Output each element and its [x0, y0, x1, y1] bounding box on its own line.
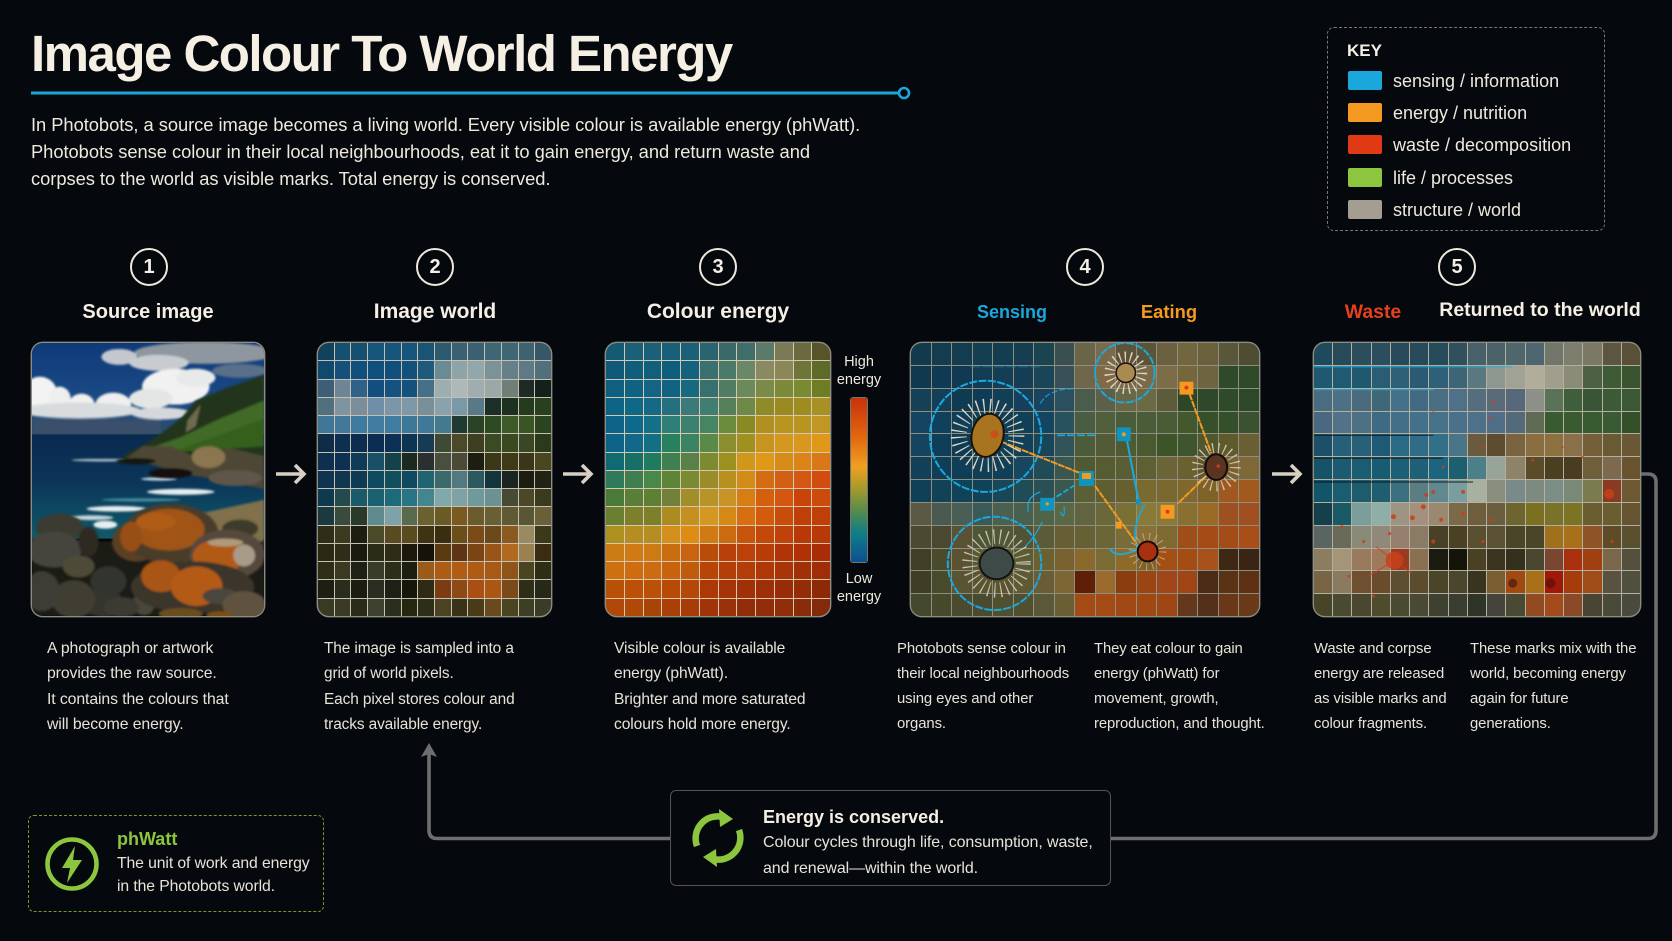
creature: small tan — [1110, 357, 1142, 389]
label: low energy: Low — [846, 571, 872, 587]
title underline with end dot — [31, 86, 910, 100]
caption: eating: They eat colour to gain — [1094, 640, 1243, 656]
label: high energy: energy — [837, 372, 881, 388]
caption: source image — [47, 640, 229, 733]
caption: image world: grid of world pixels. — [324, 665, 454, 682]
caption: sensing: Photobots sense colour in — [897, 640, 1066, 656]
intro paragraph: corpses to the world as visible marks. Total energy is conserved. — [31, 168, 550, 189]
heading: waste: Waste — [1345, 300, 1401, 322]
callout: energy is conserved — [670, 790, 1111, 886]
caption: image world: Each pixel stores colour and — [324, 691, 515, 708]
caption: eating: energy (phWatt) for — [1094, 666, 1219, 682]
heading: colour energy: Colour energy — [647, 300, 789, 322]
sky — [32, 343, 264, 437]
step number 1: 1 — [143, 256, 155, 278]
title: Image Colour To World Energy — [31, 25, 732, 82]
caption: colour energy — [614, 640, 805, 733]
dashed sensing links — [971, 367, 1145, 554]
icon: lightning bolt — [45, 837, 99, 891]
step number 4: 4 — [1079, 256, 1091, 278]
sensing rings — [930, 343, 1155, 610]
callout heading: Energy is conserved. — [763, 807, 944, 827]
arrow: panel 4 to 5 — [1272, 464, 1302, 484]
caption: returned: generations. — [1470, 716, 1551, 732]
creature: large amber — [959, 407, 1016, 464]
heading: image world: Image world — [374, 300, 496, 322]
eating nodes — [1082, 382, 1193, 529]
intro paragraph: Photobots sense colour in their local neighbourhoods, eat it to gain energy, and return waste and — [31, 141, 810, 162]
key heading: KEY — [1347, 41, 1382, 60]
caption: eating: reproduction, and thought. — [1094, 716, 1265, 732]
caption: waste: colour fragments. — [1314, 716, 1427, 732]
organisms, sensing rings and energy links — [928, 343, 1241, 611]
label: structure: structure / world — [1393, 200, 1521, 220]
caption: colour energy: energy (phWatt). — [614, 665, 728, 682]
panel 3: colour energy heat grid — [606, 343, 830, 616]
label: sensing: sensing / information — [1393, 71, 1559, 91]
icon: recycle arrows — [692, 809, 744, 867]
orange energy links — [1000, 394, 1211, 544]
label: low energy: energy — [837, 589, 881, 605]
step number 1 — [130, 248, 168, 286]
callout text — [763, 834, 1093, 876]
creature: brown — [1197, 448, 1235, 486]
caption: waste — [1314, 640, 1446, 732]
label: high energy: High — [844, 354, 874, 370]
step number 2: 2 — [429, 256, 441, 278]
caption: image world: The image is sampled into a — [324, 640, 514, 657]
panel 2: pixelated image world grid — [318, 343, 551, 616]
callout text: Colour cycles through life, consumption, waste, — [763, 834, 1093, 851]
swatch: waste — [1348, 135, 1382, 154]
waste marks and colour fragments — [1314, 366, 1614, 598]
foreground rocks — [24, 504, 266, 620]
swatch: life — [1348, 168, 1382, 186]
callout text: and renewal—within the world. — [763, 860, 978, 876]
panel 4: sensing and eating map — [911, 343, 1259, 616]
arrow: panel 1 to 2 — [276, 464, 306, 484]
cliff — [116, 375, 264, 489]
callout heading: phWatt — [117, 829, 177, 849]
waves — [70, 459, 214, 529]
step number 4 — [1066, 248, 1104, 286]
sensing nodes — [1040, 427, 1141, 511]
caption: source image: It contains the colours that — [47, 691, 229, 708]
caption: source image: A photograph or artwork — [47, 640, 213, 657]
caption: source image: provides the raw source. — [47, 665, 217, 682]
swatch: structure — [1348, 200, 1382, 218]
panel 1: source photograph — [32, 343, 264, 616]
caption: eating — [1094, 640, 1265, 732]
caption: source image: will become energy. — [47, 716, 184, 733]
caption: image world: tracks available energy. — [324, 716, 482, 733]
energy colour bar — [851, 398, 867, 562]
caption: returned: again for future — [1470, 691, 1569, 707]
heading: sensing: Sensing — [977, 302, 1047, 322]
caption: waste: as visible marks and — [1314, 691, 1446, 707]
intro paragraph: In Photobots, a source image becomes a living world. Every visible colour is available energy (phWatt). — [31, 114, 860, 135]
callout text: The unit of work and energy — [117, 855, 310, 872]
caption: colour energy: Visible colour is available — [614, 640, 785, 657]
heading: source image: Source image — [82, 300, 214, 322]
caption: colour energy: colours hold more energy. — [614, 716, 791, 733]
caption: sensing — [897, 640, 1069, 732]
intro paragraph — [31, 114, 860, 189]
caption: sensing: organs. — [897, 716, 946, 732]
step number 5: 5 — [1451, 256, 1463, 278]
callout text: in the Photobots world. — [117, 878, 275, 894]
step number 5 — [1438, 248, 1476, 286]
caption: returned: world, becoming energy — [1470, 666, 1626, 682]
creature: grey — [970, 537, 1023, 590]
caption: sensing: using eyes and other — [897, 691, 1033, 707]
step number 2 — [416, 248, 454, 286]
caption: returned — [1470, 640, 1636, 732]
caption: eating: movement, growth, — [1094, 691, 1219, 707]
sand — [181, 500, 264, 547]
caption: sensing: their local neighbourhoods — [897, 666, 1069, 682]
panel 5: waste returned to world grid — [1314, 343, 1640, 616]
panel: key legend — [1327, 27, 1605, 231]
label: energy: energy / nutrition — [1393, 103, 1527, 123]
arrow: panel 2 to 3 — [563, 464, 594, 484]
step number 3: 3 — [712, 256, 724, 278]
step number 3 — [699, 248, 737, 286]
heading: returned to the world: Returned to the world — [1439, 298, 1641, 320]
clouds — [18, 342, 277, 435]
callout text — [117, 855, 310, 894]
creature: red — [1133, 537, 1163, 566]
swatch: energy — [1348, 103, 1382, 122]
caption: image world — [324, 640, 515, 733]
caption: waste: energy are released — [1314, 666, 1444, 682]
callout: phWatt definition — [28, 815, 324, 912]
caption: colour energy: Brighter and more saturated — [614, 691, 805, 708]
caption: waste: Waste and corpse — [1314, 640, 1431, 656]
label: waste: waste / decomposition — [1393, 135, 1571, 155]
caption: returned: These marks mix with the — [1470, 640, 1636, 656]
label: life: life / processes — [1393, 168, 1513, 188]
label: high energy — [837, 354, 882, 388]
swatch: sensing — [1348, 71, 1382, 90]
label: low energy — [837, 571, 882, 605]
sea — [32, 434, 264, 539]
heading: eating: Eating — [1141, 300, 1197, 322]
